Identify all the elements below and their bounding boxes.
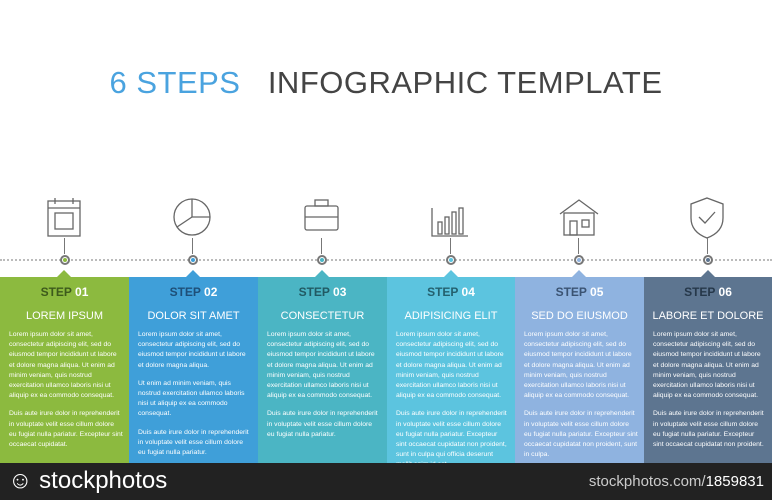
title: 6 STEPS INFOGRAPHIC TEMPLATE [109,65,663,100]
panel: step 6 [644,277,772,463]
panel: step 5: STEP 05 [556,285,603,299]
panel: step 6: LABORE ET DOLORE [652,310,764,322]
panel: step 2: Ut enim ad minim veniam, quis nostrud exercitation ullamco laboris nisi ut aliquip ex ea commodo consequat. [138,380,245,417]
panel: step 3: STEP 03 [299,285,346,299]
panel: step 2: DOLOR SIT AMET [147,310,240,322]
panel: step 1: STEP 01 [41,285,88,299]
panel: step 3: CONSECTETUR [281,310,364,322]
panel: step 3: Lorem ipsum dolor sit amet, consectetur adipiscing elit, sed do eiusmod tempor incididunt ut labore et dolore magna aliqua. Ut enim ad minim veniam, quis nostrud exercitation ullamco laboris nisi ut aliquip ex ea commodo consequat. [267,331,375,399]
icon: bar chart [432,208,468,236]
icon: house [560,200,598,235]
panel: step 5: SED DO EIUSMOD [531,310,628,322]
footer bar [0,463,772,500]
panel: step 1: LOREM IPSUM [26,310,103,322]
panel: step 2: STEP 02 [170,285,217,299]
panel: step 3: Duis aute irure dolor in reprehenderit in voluptate velit esse cillum dolore eu fugiat nulla pariatur. [267,410,378,438]
dotted timeline [0,259,772,261]
panel: step 4: Duis aute irure dolor in reprehenderit in voluptate velit esse cillum dolore eu fugiat nulla pariatur. Excepteur sint occaecat cupidatat non proident, sunt in culpa qui officia deserunt mollit anim id est. [396,410,507,468]
icons [47,197,724,239]
panel: step 3 [258,277,387,463]
panel: step 6: STEP 06 [684,285,732,299]
panel: step 4: STEP 04 [427,285,475,299]
panel: step 6: Duis aute irure dolor in reprehenderit in voluptate velit esse cillum dolore eu fugiat nulla pariatur. Excepteur sint occaecat cupidatat non proident. [653,410,764,448]
panel: step 5: Duis aute irure dolor in reprehenderit in voluptate velit esse cillum dolore eu fugiat nulla pariatur. Excepteur sint occaecat cupidatat non proident, sunt in culpa. [524,410,638,458]
panel: step 2: Lorem ipsum dolor sit amet, consectetur adipiscing elit, sed do eiusmod tempor incididunt ut labore et dolore magna aliqua. [138,331,246,369]
icon: pie chart [174,199,210,235]
panel: step 2: Duis aute irure dolor in reprehenderit in voluptate velit esse cillum dolore eu fugiat nulla pariatur. [138,429,249,456]
panel: step 5: Lorem ipsum dolor sit amet, consectetur adipiscing elit, sed do eiusmod tempor incididunt ut labore et dolore magna aliqua. Ut enim ad minim veniam, quis nostrud exercitation ullamco laboris nisi ut aliquip ex ea commodo consequat. [524,331,632,399]
icon: shield [691,198,723,238]
panel: step 1 [0,277,129,463]
icon: calendar [48,198,80,236]
panel: step 1: Duis aute irure dolor in reprehenderit in voluptate velit esse cillum dolore eu fugiat nulla pariatur. Excepteur sint occaecat cupidatat. [9,410,123,448]
icon: briefcase [305,200,338,230]
panel: step 1: Lorem ipsum dolor sit amet, consectetur adipiscing elit, sed do eiusmod tempor incididunt ut labore et dolore magna aliqua. Ut enim ad minim veniam, quis nostrud exercitation ullamco laboris nisi ut aliquip ex ea commodo consequat. [9,331,117,399]
panel: step 4: ADIPISICING ELIT [405,310,497,322]
panel: step 4 [387,277,515,463]
panel: step 6: Lorem ipsum dolor sit amet, consectetur adipiscing elit, sed do eiusmod tempor incididunt ut labore et dolore magna aliqua. Ut enim ad minim veniam, quis nostrud exercitation ullamco laboris nisi ut aliquip ex ea commodo consequat. [653,331,761,399]
logo: ☺ stockphotos [8,467,167,494]
panel: step 5 [515,277,644,463]
panel: step 4: Lorem ipsum dolor sit amet, consectetur adipiscing elit, sed do eiusmod tempor incididunt ut labore et dolore magna aliqua. Ut enim ad minim veniam, quis nostrud exercitation ullamco laboris nisi ut aliquip ex ea commodo consequat. [396,331,504,399]
panel: step 2 [129,277,258,463]
url: stockphotos.com/1859831 [589,473,764,490]
